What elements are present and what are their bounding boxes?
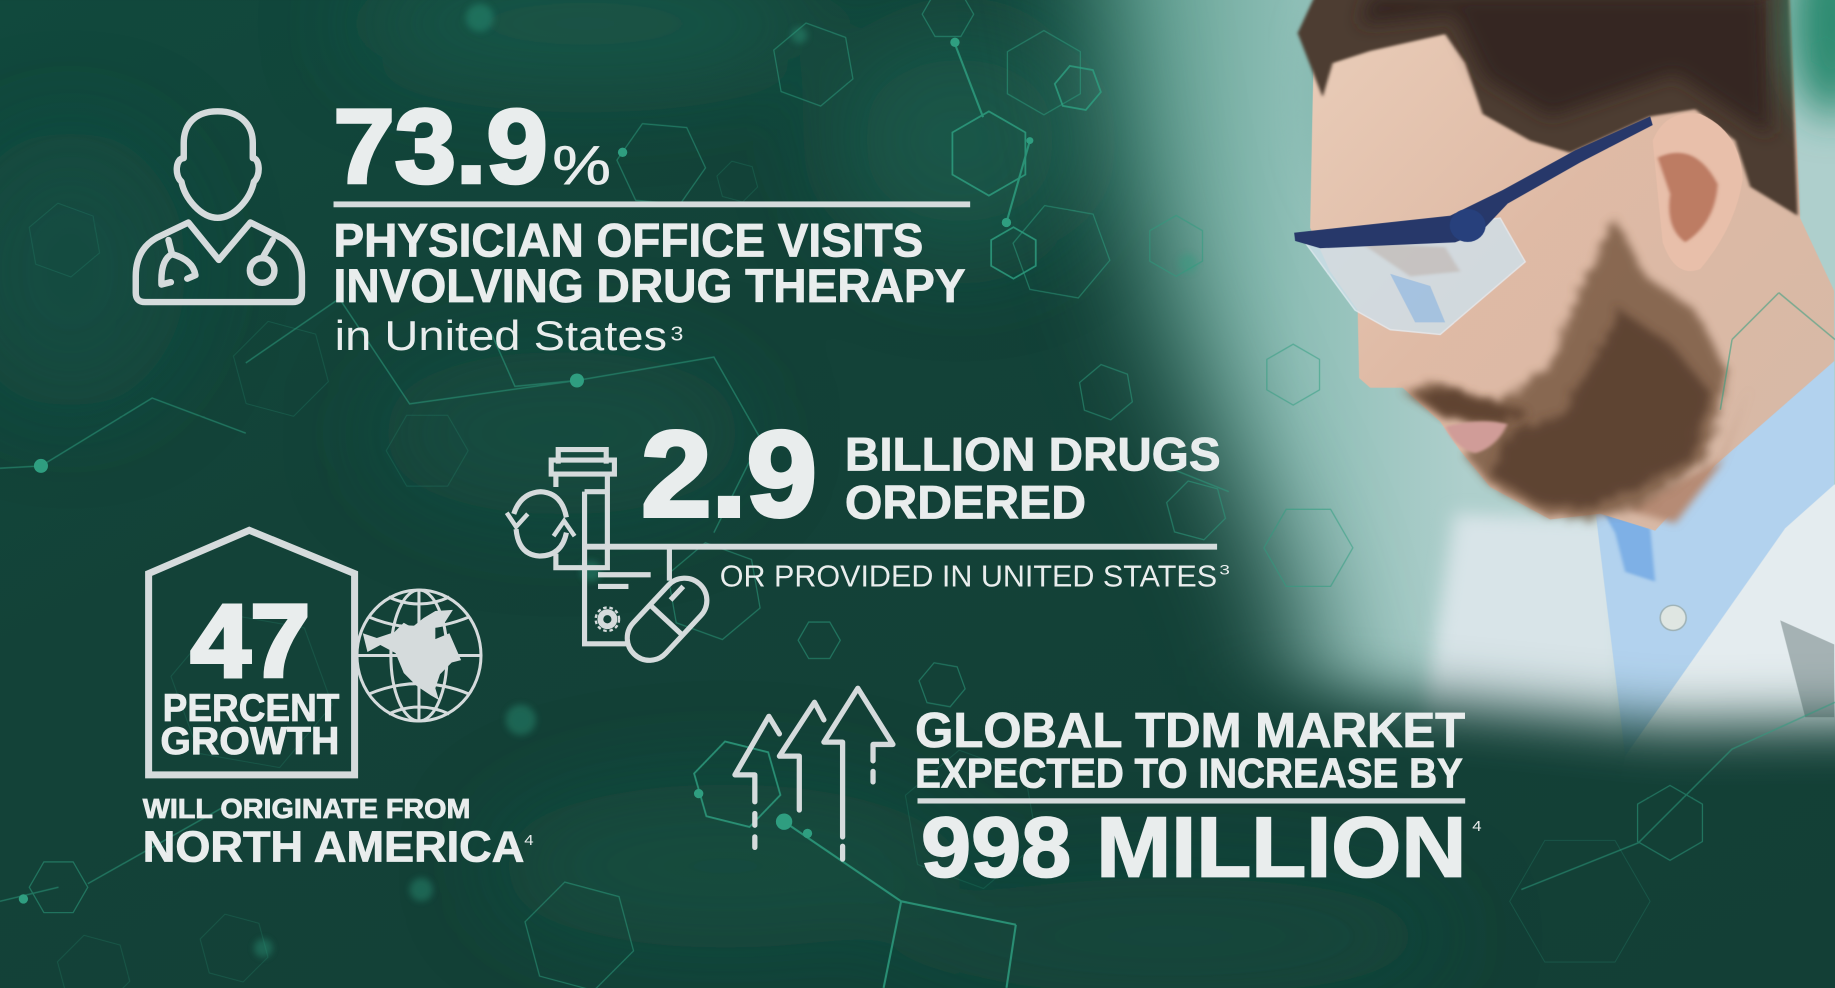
lab coat <box>1422 508 1622 742</box>
label line 1: WILL ORIGINATE FROM <box>143 793 470 824</box>
shirt button <box>1660 605 1686 630</box>
label line 2: INVOLVING DRUG THERAPY <box>334 260 965 312</box>
big number 2.9: 2.9 <box>641 406 817 542</box>
beard dense core <box>1490 310 1710 506</box>
PERCENT: PERCENT <box>163 687 340 730</box>
label line 1: BILLION DRUGS <box>845 429 1221 481</box>
icon: doctor with stethoscope <box>136 111 302 302</box>
big value 998 MILLION: 998 MILLION <box>921 801 1466 896</box>
capsule <box>618 569 716 669</box>
icon: globe with North America <box>357 590 481 721</box>
label line 2: NORTH AMERICA <box>143 823 524 871</box>
top right teal corner <box>1791 0 1835 117</box>
footnote 3: 3 <box>671 324 683 346</box>
icon: pill bottle, prescription and capsule <box>507 450 1217 669</box>
ear <box>1653 113 1743 271</box>
footnote 3: 3 <box>1219 562 1230 578</box>
neck and face skin <box>1310 0 1834 531</box>
glasses frame <box>1294 116 1653 248</box>
hair <box>1298 0 1798 216</box>
icon: three rising arrows <box>735 688 893 859</box>
label line 2: ORDERED <box>845 477 1086 529</box>
seal <box>600 612 614 626</box>
divider <box>918 798 1465 804</box>
stat 1: physician office visits <box>136 89 970 359</box>
stat 4: global TDM market <box>735 688 1482 896</box>
stat 2: billion drugs ordered <box>507 406 1230 669</box>
refresh arrows <box>514 492 566 556</box>
GROWTH: GROWTH <box>160 720 339 763</box>
coat right lapel <box>1633 484 1835 750</box>
label line 3: in United States <box>335 312 667 359</box>
lips <box>1445 421 1508 453</box>
beard sparse outer <box>1405 218 1728 520</box>
percent sign: % <box>552 134 611 196</box>
safety lens <box>1305 218 1525 334</box>
big number 47: 47 <box>191 584 310 699</box>
scientist figure <box>1294 0 1835 750</box>
photo backdrop <box>1026 0 1835 748</box>
big number 73.9%: 73.9 <box>334 89 548 206</box>
divider <box>334 201 970 207</box>
label line 2: EXPECTED TO INCREASE BY <box>915 750 1463 797</box>
house frame <box>149 530 355 775</box>
label line 1: GLOBAL TDM MARKET <box>915 704 1465 758</box>
stat 3: 47 percent growth <box>143 530 534 871</box>
footnote 4: 4 <box>1472 818 1482 835</box>
blue shirt <box>1595 359 1834 756</box>
sub label: OR PROVIDED IN UNITED STATES <box>720 559 1217 593</box>
footnote 4: 4 <box>524 832 534 849</box>
label line 1: PHYSICIAN OFFICE VISITS <box>334 214 923 266</box>
photo: scientist wearing safety glasses <box>1026 0 1835 769</box>
